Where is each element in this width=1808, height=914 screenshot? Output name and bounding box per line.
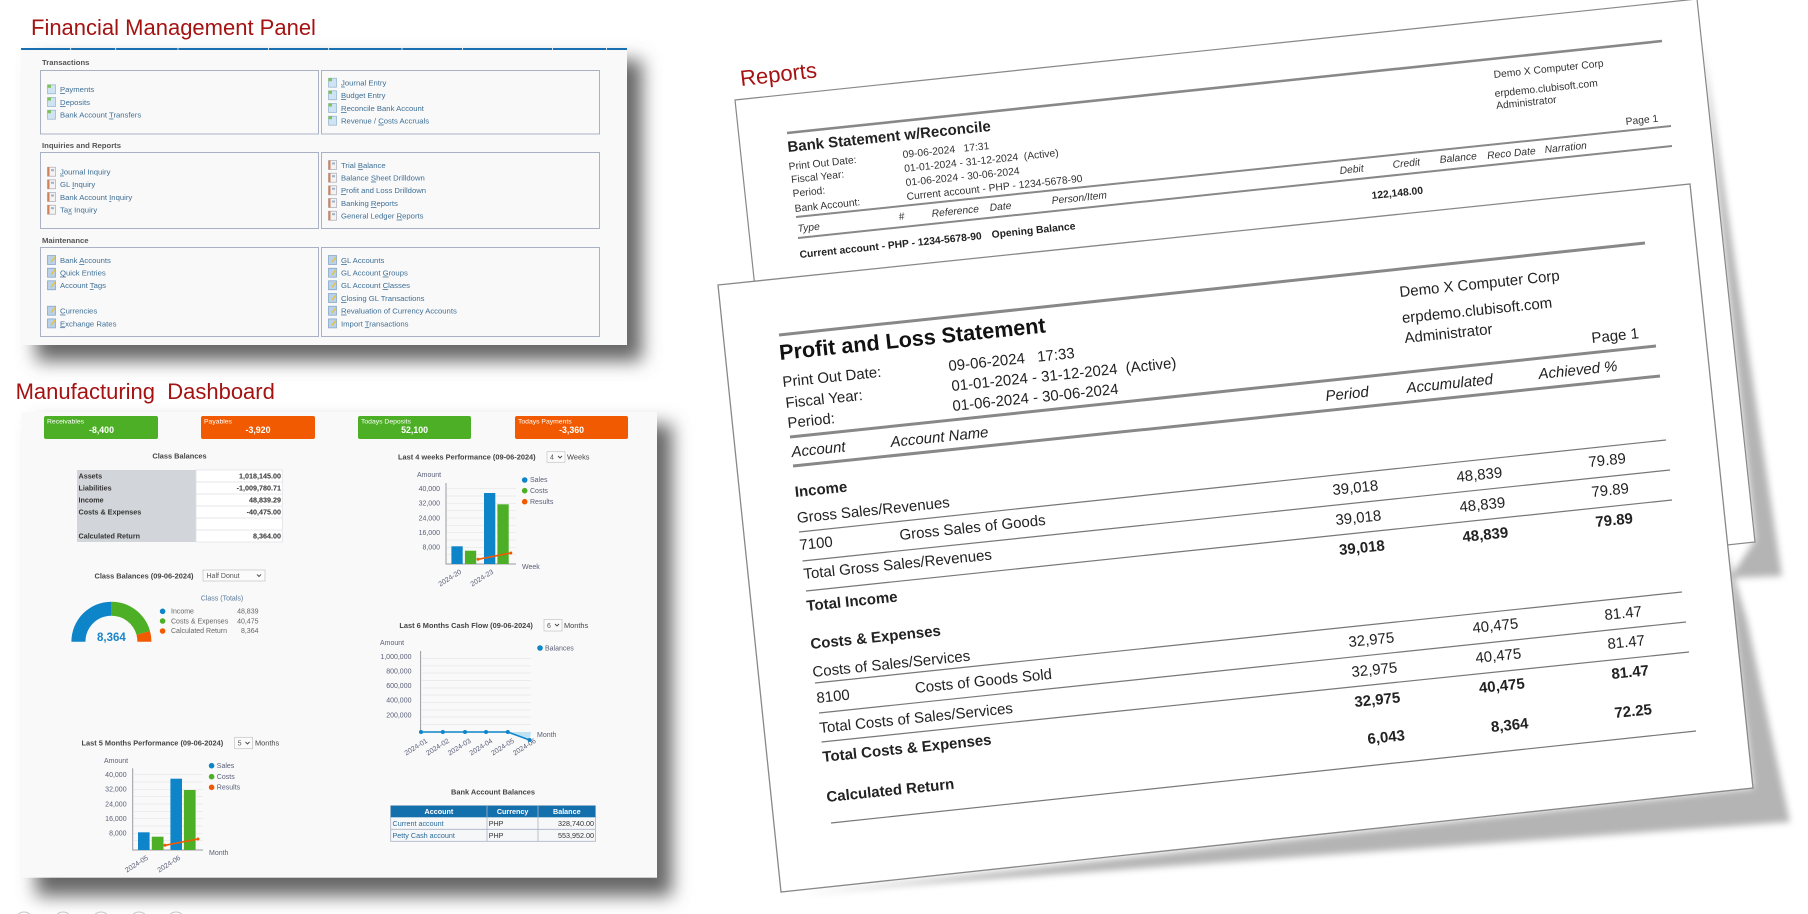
- costs and expenses rows: Costs of Sales/Services: [812, 648, 971, 681]
- section: transactions: Transactions: [42, 58, 89, 67]
- title: Manufacturing Dashboard: Manufacturing Dashboard: [16, 379, 275, 404]
- profit and loss header fields: Administrator: [1404, 321, 1493, 347]
- KPI card: payables: Payables: [204, 418, 233, 426]
- line chart: last 6 months cash flow: Amount: [380, 640, 404, 647]
- section: inquiries and reports: Profit and Loss Drilldown: [341, 186, 426, 195]
- bank statement header fields: Demo X Computer Corp: [1493, 59, 1604, 81]
- profit and loss header fields: Demo X Computer Corp: [1399, 267, 1560, 301]
- table: class balances: Income: [78, 496, 104, 505]
- bar chart: last 5 months performance: 40,000: [105, 772, 127, 779]
- line chart: last 6 months cash flow: Month: [537, 732, 557, 739]
- bank statement header fields: [788, 59, 1659, 215]
- costs and expenses rows: Total Costs & Expenses: [822, 732, 992, 766]
- profit and loss title: Profit and Loss Statement: [778, 312, 1047, 365]
- section: inquiries and reports: Journal Inquiry: [60, 168, 111, 177]
- section: transactions: Payments: [60, 85, 94, 94]
- heading: class balances half donut with selector: Half Donut: [206, 573, 240, 580]
- income rows: 79.89: [1591, 480, 1630, 501]
- table: bank account balances: Petty Cash account: [392, 831, 455, 840]
- bank statement header fields: Period:: [792, 186, 826, 200]
- bar chart: last 4 weeks performance: Sales: [530, 477, 548, 484]
- table: bank account balances: [391, 806, 595, 841]
- line chart: last 6 months cash flow: 600,000: [386, 683, 412, 690]
- section: transactions: Journal Entry: [341, 79, 386, 88]
- section: transactions: Deposits: [60, 98, 90, 107]
- profit and loss header fields: erpdemo.clubisoft.com: [1401, 294, 1553, 327]
- calculated return row: 8,364: [1490, 715, 1530, 736]
- section: inquiries and reports: Bank Account Inquiry: [60, 193, 132, 202]
- bar chart: last 4 weeks performance: Week: [522, 564, 540, 571]
- bank statement header fields: Administrator: [1496, 95, 1558, 112]
- section: inquiries and reports: Banking Reports: [341, 199, 398, 208]
- income rows: Income: [794, 479, 848, 501]
- bank statement column headings: Type: [797, 222, 821, 235]
- line chart: last 6 months cash flow: Balances: [545, 645, 574, 652]
- section: maintenance: GL Account Groups: [341, 269, 408, 278]
- bar chart: last 4 weeks performance: 2024-23: [470, 569, 495, 588]
- bar chart: last 5 months performance: Sales: [217, 763, 235, 770]
- line chart: last 6 months cash flow: 400,000: [386, 698, 412, 705]
- calculated return row: Calculated Return: [826, 776, 955, 806]
- KPI card: todays deposits: Todays Deposits: [361, 418, 411, 426]
- heading: last 5 months performance with selector: Last 5 Months Performance (09-06-2024): [82, 738, 224, 748]
- KPI card: todays deposits: 52,100: [401, 425, 428, 435]
- table: class balances: -1,009,780.71: [237, 484, 281, 493]
- bar chart: last 5 months performance: 2024-05: [124, 855, 150, 874]
- costs and expenses rows: 81.47: [1611, 662, 1650, 683]
- section: inquiries and reports: GL Inquiry: [60, 180, 95, 189]
- section: maintenance: Closing GL Transactions: [341, 294, 425, 303]
- income rows: 48,839: [1459, 494, 1506, 516]
- bank statement column headings: Reco Date: [1487, 146, 1536, 162]
- bar chart: last 4 weeks performance: 8,000: [422, 545, 440, 552]
- bar chart: last 5 months performance: 32,000: [105, 787, 127, 794]
- table: class balances: Costs & Expenses: [78, 508, 141, 516]
- title: Reports: Reports: [739, 57, 818, 91]
- costs and expenses rows: [810, 603, 1650, 766]
- section: maintenance: [40, 236, 600, 336]
- bar chart: last 4 weeks performance: Amount: [417, 472, 441, 479]
- bank statement header fields: Page 1: [1625, 114, 1659, 128]
- heading: last 6 months cash flow with selector: [399, 620, 589, 631]
- half donut chart: 8,364: [97, 632, 126, 644]
- income rows: Gross Sales of Goods: [899, 512, 1046, 544]
- heading: last 6 months cash flow with selector: 6: [547, 623, 551, 630]
- profit and loss column headings: Achieved %: [1537, 358, 1618, 383]
- profit and loss header fields: 01-01-2024 - 31-12-2024 (Active): [951, 355, 1177, 395]
- bank statement opening balance row: 122,148.00: [1371, 186, 1424, 202]
- bar chart: last 4 weeks performance: Costs: [530, 488, 548, 495]
- KPI card: receivables: Receivables: [47, 418, 85, 426]
- bar chart: last 4 weeks performance: [417, 472, 554, 588]
- bank statement column headings: Narration: [1544, 141, 1588, 156]
- costs and expenses rows: 40,475: [1478, 675, 1526, 697]
- bank statement header fields: Bank Account:: [794, 197, 861, 215]
- bank statement column headings: Reference: [931, 204, 980, 220]
- heading: last 4 weeks performance with selector: Weeks: [567, 452, 590, 462]
- table: bank account balances: Currency: [497, 807, 528, 816]
- costs and expenses rows: 40,475: [1475, 645, 1522, 667]
- half donut chart: [71, 602, 151, 644]
- table: bank account balances: Account: [425, 807, 454, 816]
- bar chart: last 5 months performance: Amount: [104, 758, 128, 765]
- profit and loss column headings: Accumulated: [1405, 371, 1494, 397]
- KPI card: receivables: [44, 416, 158, 439]
- costs and expenses rows: 8100: [816, 687, 851, 707]
- costs and expenses rows: Costs of Goods Sold: [914, 666, 1053, 697]
- bank statement header fields: 09-06-2024 17:31: [902, 141, 990, 161]
- table: class balances: 1,018,145.00: [239, 472, 281, 481]
- table: class balances: [77, 470, 282, 542]
- profit and loss header fields: Fiscal Year:: [785, 387, 864, 412]
- KPI card: todays payments: [515, 416, 628, 439]
- income rows: 39,018: [1332, 477, 1379, 499]
- bar chart: last 5 months performance: Month: [209, 850, 229, 857]
- income rows: 79.89: [1595, 510, 1634, 531]
- bar chart: last 5 months performance: [104, 758, 241, 874]
- heading: last 6 months cash flow with selector: Last 6 Months Cash Flow (09-06-2024): [399, 621, 533, 630]
- section: maintenance: GL Account Classes: [341, 281, 410, 290]
- profit and loss header fields: Print Out Date:: [782, 364, 882, 391]
- legend: class totals: 48,839: [237, 608, 259, 616]
- profit and loss header fields: [782, 267, 1640, 432]
- bank statement header fields: Print Out Date:: [788, 155, 857, 173]
- bank statement opening balance row: [799, 186, 1424, 261]
- costs and expenses rows: 40,475: [1472, 615, 1519, 637]
- legend: class totals: Costs & Expenses: [171, 618, 229, 625]
- section: inquiries and reports: Tax Inquiry: [60, 206, 97, 215]
- heading: class balances: Class Balances: [152, 452, 207, 460]
- section: transactions: Budget Entry: [341, 91, 386, 100]
- heading: last 5 months performance with selector: 5: [238, 740, 242, 748]
- profit and loss column headings: Account: [790, 438, 847, 461]
- income rows: 39,018: [1335, 507, 1382, 529]
- bar chart: last 4 weeks performance: 32,000: [419, 501, 440, 508]
- bar chart: last 5 months performance: 16,000: [105, 816, 127, 823]
- costs and expenses rows: 32,975: [1348, 629, 1395, 651]
- bar chart: last 4 weeks performance: 40,000: [419, 486, 440, 493]
- line chart: last 6 months cash flow: 2024-06: [512, 738, 538, 757]
- heading: last 6 months cash flow with selector: Months: [564, 621, 589, 630]
- bar chart: last 4 weeks performance: Results: [530, 499, 554, 506]
- bank statement column headings: Debit: [1339, 163, 1365, 177]
- heading: class balances half donut with selector: [94, 570, 265, 581]
- heading: class balances half donut with selector: Class Balances (09-06-2024): [94, 572, 194, 580]
- table: bank account balances: Current account: [392, 819, 444, 828]
- section: transactions: Reconcile Bank Account: [341, 104, 425, 113]
- KPI card: todays deposits: [358, 416, 471, 439]
- report page: profit and loss statement: [718, 184, 1790, 894]
- section: maintenance: Quick Entries: [60, 269, 106, 278]
- line chart: last 6 months cash flow: 2024-01: [404, 738, 429, 757]
- panel: financial management: [21, 48, 642, 361]
- bar chart: last 4 weeks performance: 24,000: [419, 515, 440, 522]
- costs and expenses rows: 81.47: [1607, 632, 1646, 653]
- bank statement header fields: erpdemo.clubisoft.com: [1494, 78, 1598, 100]
- bar chart: last 5 months performance: 8,000: [109, 831, 127, 838]
- legend: class totals: Calculated Return: [171, 628, 227, 635]
- bank statement column headings: #: [898, 211, 905, 223]
- profit and loss column headings: [790, 358, 1618, 461]
- income rows: 48,839: [1456, 464, 1503, 486]
- bank statement header fields: Fiscal Year:: [791, 170, 845, 186]
- income rows: Gross Sales/Revenues: [796, 494, 950, 527]
- profit and loss header fields: 09-06-2024 17:33: [948, 345, 1076, 375]
- heading: bank account balances: Bank Account Balances: [451, 788, 535, 796]
- table: class balances: 48,839.29: [249, 496, 281, 505]
- section: maintenance: Import Transactions: [341, 319, 409, 328]
- section: inquiries and reports: Balance Sheet Drilldown: [341, 174, 425, 183]
- table: class balances: 8,364.00: [253, 532, 281, 540]
- section: transactions: [40, 58, 600, 134]
- bank statement column headings: Credit: [1392, 157, 1422, 171]
- KPI card: payables: [201, 416, 315, 439]
- bank statement header fields: 01-01-2024 - 31-12-2024 (Active): [904, 148, 1059, 175]
- bank statement column headings: Balance: [1439, 151, 1478, 166]
- heading: last 5 months performance with selector: [82, 737, 280, 749]
- income rows: 39,018: [1338, 537, 1386, 559]
- bank statement opening balance row: Opening Balance: [991, 221, 1076, 241]
- section: maintenance: Exchange Rates: [60, 319, 117, 328]
- KPI card: todays payments: Todays Payments: [518, 418, 572, 426]
- section: maintenance: Bank Accounts: [60, 256, 111, 265]
- table: class balances: Liabilities: [78, 484, 112, 493]
- table: bank account balances: 328,740.00: [558, 819, 594, 828]
- section: transactions: Bank Account Transfers: [60, 111, 141, 120]
- income rows: Total Income: [806, 589, 898, 615]
- section: transactions: Revenue / Costs Accruals: [341, 117, 429, 126]
- income rows: 48,839: [1462, 524, 1509, 546]
- costs and expenses rows: 32,975: [1351, 659, 1398, 681]
- section: inquiries and reports: General Ledger Reports: [341, 212, 424, 221]
- income rows: Total Gross Sales/Revenues: [803, 547, 993, 583]
- bar chart: last 5 months performance: 24,000: [105, 801, 127, 808]
- table: class balances: Assets: [78, 472, 102, 481]
- costs and expenses rows: 81.47: [1604, 603, 1643, 624]
- section: maintenance: Revaluation of Currency Accounts: [341, 307, 457, 316]
- table: bank account balances: 553,952.00: [558, 831, 594, 840]
- profit and loss header fields: Page 1: [1591, 325, 1640, 347]
- profit and loss column headings: Account Name: [889, 424, 989, 451]
- calculated return row: 6,043: [1367, 727, 1406, 748]
- costs and expenses rows: Costs & Expenses: [810, 623, 942, 653]
- calculated return row: 72.25: [1614, 701, 1653, 722]
- section: maintenance: Account Tags: [60, 281, 106, 290]
- bank statement column headings: Date: [989, 201, 1012, 214]
- line chart: last 6 months cash flow: 200,000: [386, 712, 412, 719]
- heading: last 4 weeks performance with selector: Last 4 weeks Performance (09-06-2024): [398, 452, 536, 462]
- profit and loss header fields: Period:: [787, 410, 836, 432]
- bank statement opening balance row: Current account - PHP - 1234-5678-90: [799, 231, 983, 261]
- line chart: last 6 months cash flow: 2024-04: [469, 738, 494, 757]
- heading: last 4 weeks performance with selector: [398, 452, 590, 462]
- KPI card: todays payments: -3,360: [559, 425, 584, 435]
- legend: class totals: Class (Totals): [201, 596, 243, 603]
- line chart: last 6 months cash flow: 2024-02: [425, 738, 451, 757]
- legend: class totals: 40,475: [237, 618, 259, 625]
- bar chart: last 4 weeks performance: 2024-20: [438, 569, 463, 588]
- line chart: last 6 months cash flow: [380, 640, 574, 757]
- table: bank account balances: PHP: [489, 819, 504, 828]
- income rows: 7100: [799, 534, 834, 554]
- line chart: last 6 months cash flow: 2024-03: [447, 738, 473, 757]
- legend: class totals: [160, 596, 259, 635]
- bar chart: last 5 months performance: Costs: [217, 774, 235, 781]
- bar chart: last 5 months performance: Results: [217, 785, 241, 792]
- section: maintenance: Maintenance: [42, 236, 89, 245]
- line chart: last 6 months cash flow: 1,000,000: [380, 654, 412, 661]
- bottom row of circular controls: [15, 912, 185, 914]
- bank statement column headings: Person/Item: [1051, 190, 1108, 207]
- bank statement header fields: 01-06-2024 - 30-06-2024: [905, 166, 1020, 189]
- panel: manufacturing dashboard: [22, 412, 672, 896]
- section: inquiries and reports: Inquiries and Reports: [42, 141, 121, 150]
- section: maintenance: GL Accounts: [341, 256, 384, 265]
- income rows: 79.89: [1588, 450, 1627, 471]
- calculated return row: [826, 701, 1653, 806]
- costs and expenses rows: 32,975: [1354, 689, 1401, 711]
- KPI card: receivables: -8,400: [89, 425, 114, 435]
- legend: class totals: Income: [171, 608, 194, 616]
- table: class balances: -40,475.00: [247, 508, 281, 516]
- bar chart: last 5 months performance: 2024-06: [157, 855, 182, 874]
- heading: last 4 weeks performance with selector: 4: [550, 454, 554, 462]
- section: inquiries and reports: [40, 141, 600, 228]
- line chart: last 6 months cash flow: 2024-05: [490, 738, 516, 757]
- section: maintenance: Currencies: [60, 307, 97, 316]
- bar chart: last 4 weeks performance: 16,000: [419, 530, 440, 537]
- heading: last 5 months performance with selector: Months: [255, 738, 280, 748]
- report page: bank statement with reconcile: [735, 0, 1782, 645]
- profit and loss header fields: 01-06-2024 - 30-06-2024: [952, 381, 1119, 415]
- income rows: [794, 450, 1634, 615]
- profit and loss column headings: Period: [1325, 384, 1370, 405]
- table: bank account balances: Balance: [553, 807, 581, 816]
- legend: class totals: 8,364: [241, 628, 259, 635]
- table: bank account balances: PHP: [489, 831, 504, 840]
- section: inquiries and reports: Trial Balance: [341, 161, 386, 170]
- bank statement title: Bank Statement w/Reconcile: [787, 118, 992, 156]
- costs and expenses rows: Total Costs of Sales/Services: [819, 700, 1014, 737]
- table: class balances: Calculated Return: [78, 532, 140, 540]
- bank statement column headings: [797, 141, 1588, 235]
- line chart: last 6 months cash flow: 800,000: [386, 668, 412, 675]
- KPI card: payables: -3,920: [246, 425, 271, 435]
- title: Financial Management Panel: Financial Management Panel: [31, 15, 316, 40]
- bank statement header fields: Current account - PHP - 1234-5678-90: [906, 174, 1083, 203]
